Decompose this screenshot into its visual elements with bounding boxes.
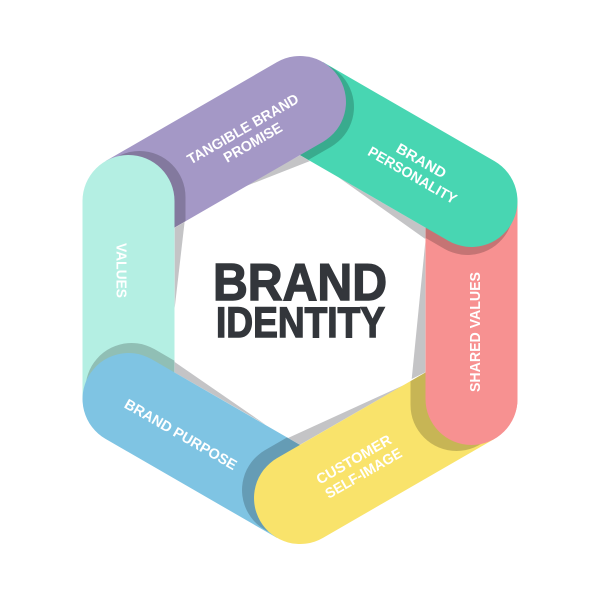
label: brand personality: BRAND — [393, 141, 449, 182]
segment: brand personality — [277, 62, 534, 264]
shadow of customer self-image — [242, 438, 300, 532]
label: tangible brand promise: TANGIBLE BRAND — [185, 91, 302, 168]
segment: shared values base — [426, 201, 518, 445]
title — [213, 254, 387, 347]
label: customer self-image: CUSTOMER — [314, 432, 395, 488]
shadow of shared values — [410, 372, 480, 451]
label: brand personality: PERSONALITY — [365, 144, 460, 208]
shadow of brand personality — [426, 226, 510, 255]
label: shared values: SHARED VALUES — [468, 272, 484, 392]
segment: values — [82, 155, 174, 399]
label: values: VALUES — [113, 243, 129, 298]
label: brand purpose: BRAND PURPOSE — [121, 397, 240, 474]
grey inner shadows — [175, 155, 425, 445]
shadow of brand purpose — [86, 343, 174, 381]
title: BRAND — [213, 254, 387, 312]
label: customer self-image: SELF-IMAGE — [323, 445, 406, 502]
segment: brand purpose — [66, 336, 323, 538]
shadow of values — [118, 151, 186, 228]
shadow of tangible brand promise — [300, 66, 354, 160]
segment: tangible brand promise — [106, 39, 363, 241]
segment: customer self-image — [237, 359, 494, 561]
hexagon diagram — [82, 56, 518, 544]
title: IDENTITY — [216, 299, 385, 347]
segment: shared values cap — [426, 359, 518, 445]
label: tangible brand promise: PROMISE — [221, 120, 286, 166]
